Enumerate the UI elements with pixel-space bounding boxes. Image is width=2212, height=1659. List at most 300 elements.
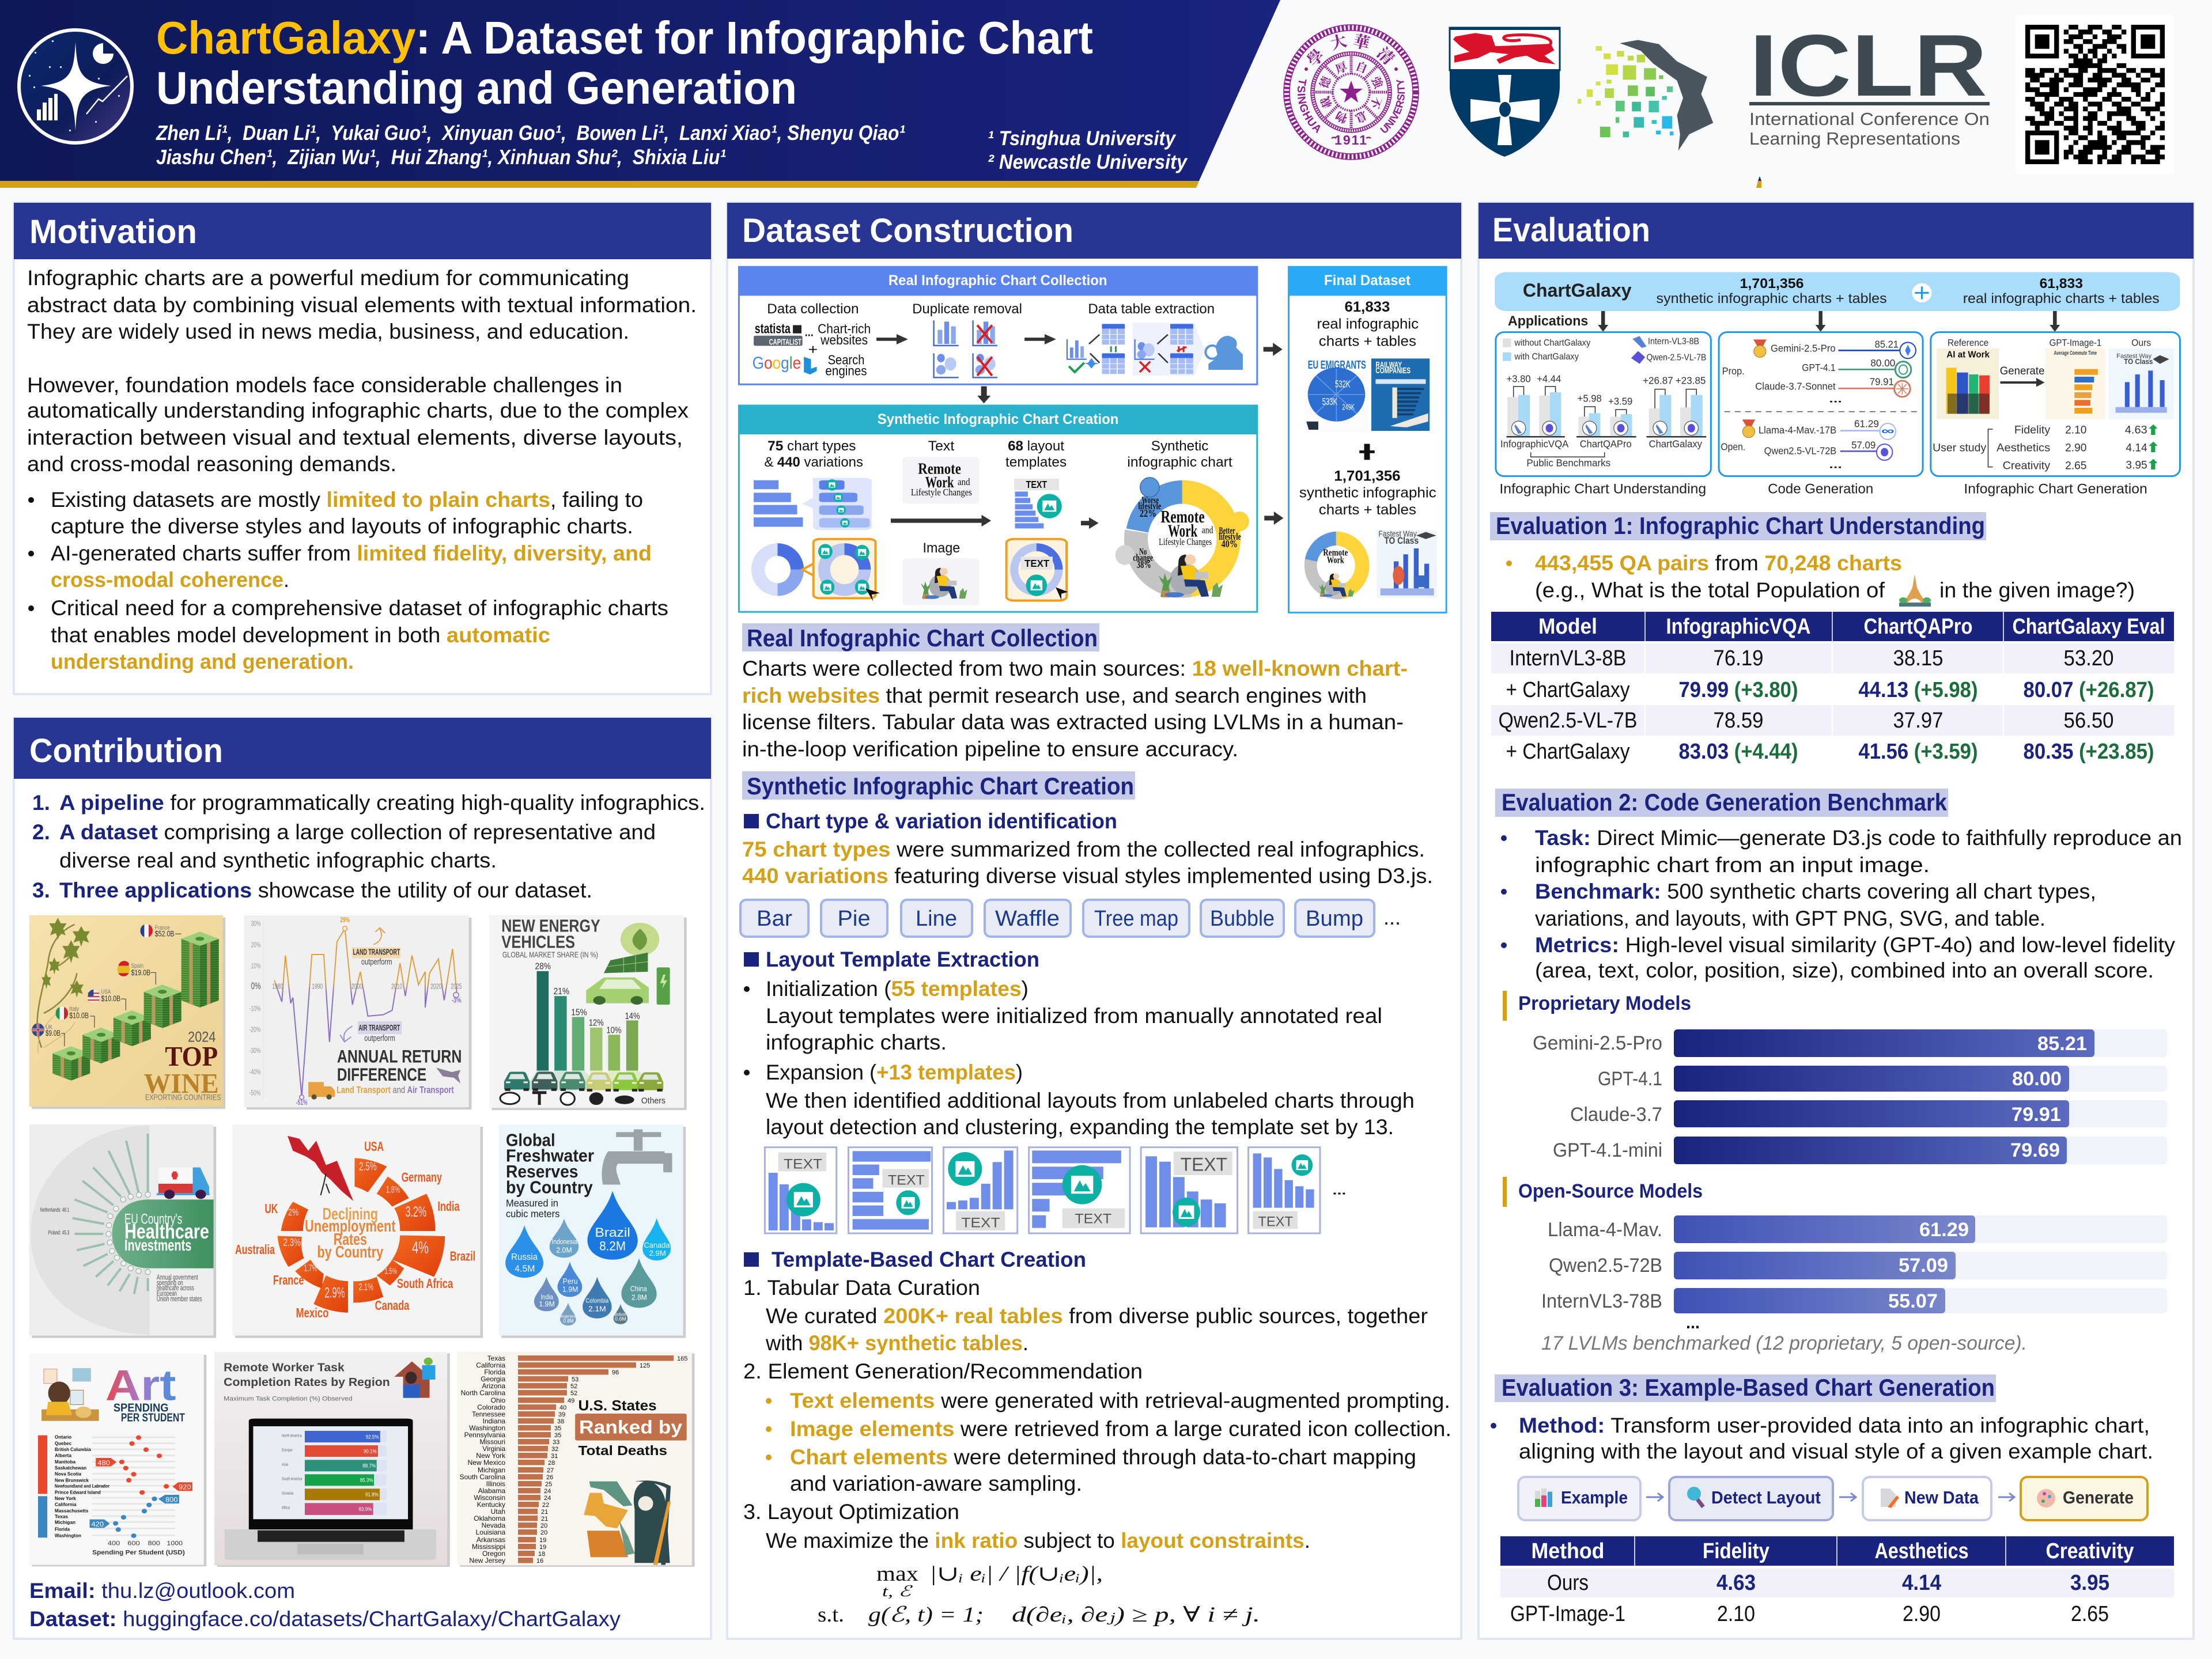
thumbnail: annual return difference: 2000 xyxy=(351,982,362,991)
note: LVLMs benchmarked xyxy=(1541,1313,2027,1354)
thumbnail: declining unemployment: Canada xyxy=(375,1298,410,1313)
chips: chart types xyxy=(740,900,1401,937)
box: real infographic chart collection: Chart-rich xyxy=(818,321,871,336)
text block: real infographic chart collection xyxy=(742,623,1408,761)
bullet list: task, benchmark, metrics: Task: Direct Mimic—generate D3.js code to faithfully reproduce an xyxy=(1535,826,2182,850)
thumbnail: new energy vehicles: 10% xyxy=(606,1025,621,1035)
box: infographic chart generation: 2.65 xyxy=(2065,459,2086,472)
table: evaluation 3 results: Ours xyxy=(1547,1571,1589,1595)
section: evaluation 3 xyxy=(1491,1374,2174,1626)
thumbnail: annual return difference: 30% xyxy=(251,919,260,927)
section: evaluation 1 xyxy=(1490,512,2174,764)
heading: motivation xyxy=(14,203,711,259)
diagram: ChartGalaxy applications: ChartGalaxy xyxy=(1649,438,1702,450)
bar chart: total deaths by state: Alabama xyxy=(478,1487,505,1495)
panel: contribution xyxy=(14,718,711,1639)
box: code generation: ... xyxy=(1829,459,1842,471)
bar chart: open-source models: InternVL3-78B xyxy=(1541,1290,1662,1312)
heading: dataset construction xyxy=(727,203,1461,259)
table: evaluation 1 results: 56.50 xyxy=(2064,709,2113,733)
bar chart: total deaths by state: South Carolina xyxy=(460,1473,505,1481)
step: new data: New Data xyxy=(1904,1487,1979,1508)
thumbnail: art spending: 800 xyxy=(165,1496,178,1503)
thumbnail: art spending: New York xyxy=(55,1496,76,1501)
thumbnail: global freshwater reserves: 2.9M xyxy=(649,1249,666,1257)
bar chart: total deaths by state: 26 xyxy=(546,1474,553,1481)
box: final dataset: 533K xyxy=(1322,396,1337,407)
thumbnail: annual return difference: outperform xyxy=(361,957,392,967)
band: dataset summary: synthetic infographic charts + tables xyxy=(1657,291,1887,306)
thumbnail: annual return difference: 20% xyxy=(251,941,260,949)
bar chart: total deaths by state: 35 xyxy=(554,1425,561,1432)
chart: synthetic donut: and xyxy=(1202,525,1213,535)
bar chart: proprietary models: GPT-4.1 xyxy=(1598,1068,1662,1090)
thumbnail: healthcare investments: Netherlands: 48.1 xyxy=(40,1206,69,1213)
thumbnail: global freshwater reserves: Argentina xyxy=(561,1315,577,1319)
table: evaluation 3 results: 4.63 xyxy=(1716,1571,1756,1595)
bar chart: total deaths by state: Nevada xyxy=(482,1521,505,1529)
text block: intro: automatically understanding infographic charts, due to the complex xyxy=(27,399,689,422)
box: infographic chart understanding: +26.87 xyxy=(1643,375,1673,387)
box: synthetic infographic chart creation: TEXT xyxy=(1024,558,1049,569)
thumbnail: new energy vehicles: 15% xyxy=(571,1007,587,1017)
text block: method: Method: Transform user-provided data into an infographic chart, xyxy=(1519,1414,2150,1437)
chart: synthetic donut xyxy=(1116,478,1249,598)
box: synthetic infographic chart creation xyxy=(739,406,1257,612)
text block: layout template extraction: layout detection and clustering, expanding the template set by 13. xyxy=(766,1115,1394,1139)
box: final dataset: TO Class xyxy=(1384,535,1419,546)
panel: motivation xyxy=(14,203,711,694)
thumbnail: global freshwater reserves: Global xyxy=(506,1130,555,1150)
logo: Tsinghua University: UNIVERSITY xyxy=(1380,79,1405,133)
text block: template-based chart creation: 3. Layout Optimization xyxy=(743,1500,959,1524)
thumbnail: global freshwater reserves: by Country xyxy=(506,1177,593,1197)
bullet list: task, benchmark, metrics: Benchmark: 500 synthetic charts covering all chart types, xyxy=(1535,880,2096,903)
thumbnail: remote worker task completion xyxy=(214,1352,450,1567)
thumbnail: top wine: Italy xyxy=(69,1006,80,1013)
bar chart: total deaths by state: Washington xyxy=(469,1424,505,1432)
bar chart: open-source models xyxy=(1503,1177,2167,1313)
band: dataset summary: ChartGalaxy xyxy=(1523,279,1632,301)
box: code generation: 79.91 xyxy=(1870,376,1894,388)
thumbnail: annual return difference: -40% xyxy=(249,1067,260,1076)
QR code xyxy=(2016,15,2174,174)
thumbnail: global freshwater reserves: 0.6M xyxy=(615,1316,626,1322)
table: evaluation 1 results xyxy=(1491,612,2174,764)
thumbnail: top wine: Spain xyxy=(131,963,143,969)
bar chart: total deaths by state: 21 xyxy=(541,1509,548,1516)
bar chart: total deaths by state: 53 xyxy=(572,1376,578,1383)
chips: chart types: Tree map xyxy=(1094,907,1178,931)
box: final dataset: Final Dataset xyxy=(1324,272,1411,289)
box: real infographic chart collection: + xyxy=(808,342,818,357)
bar chart: total deaths by state: New Mexico xyxy=(468,1459,505,1467)
thumbnail: global freshwater reserves: Canada xyxy=(644,1241,670,1249)
box: code generation: 80.00 xyxy=(1870,357,1895,369)
thumbnail: top wine: $52.0B xyxy=(155,929,174,938)
chips: chart types: Pie xyxy=(838,907,870,931)
box: infographic chart generation: Creativity xyxy=(2003,459,2050,472)
chips: chart types: Line xyxy=(916,907,957,931)
bullet list: challenges: Critical need for a comprehensive dataset of infographic charts xyxy=(51,596,668,620)
thumbnail: remote worker task completion: Oceania xyxy=(282,1491,293,1495)
text block: chart type identification: 440 variations featuring diverse visual styles implemented using D3.js. xyxy=(742,864,1433,888)
logo: Tsinghua University: 1911 xyxy=(1334,132,1368,147)
thumbnail: art spending: 400 xyxy=(108,1540,120,1547)
arrow xyxy=(1646,1493,1663,1501)
thumbnail: global freshwater reserves: Freshwater xyxy=(506,1146,594,1166)
logo: Tsinghua University: 學 xyxy=(1301,43,1329,71)
thumbnail: art spending xyxy=(29,1353,206,1566)
bar chart: total deaths by state: Illinois xyxy=(486,1480,505,1488)
bar chart: total deaths by state: 40 xyxy=(559,1404,566,1411)
box: synthetic infographic chart creation: Text xyxy=(928,438,955,454)
thumbnail: healthcare investments: Annual government xyxy=(157,1274,198,1282)
thumbnail: art spending: Manitoba xyxy=(55,1459,75,1465)
thumbnail: healthcare investments xyxy=(29,1124,216,1338)
thumbnail: annual return difference xyxy=(244,915,471,1109)
bar chart: proprietary models: Proprietary Models xyxy=(1518,993,1691,1014)
box: real infographic chart collection: engines xyxy=(825,363,867,378)
step: detect layout xyxy=(1669,1477,1833,1520)
thumbnail: declining unemployment: by Country xyxy=(317,1243,383,1261)
logo: Tsinghua University: 不 xyxy=(1367,94,1387,112)
bar chart: total deaths by state: 24 xyxy=(544,1488,551,1495)
bar chart: total deaths by state: 20 xyxy=(540,1529,547,1536)
thumbnail: art spending: Art xyxy=(105,1361,176,1410)
box: synthetic infographic chart creation: & 440 variations xyxy=(764,454,863,470)
box: final dataset xyxy=(1289,267,1446,612)
box: infographic chart generation: Reference xyxy=(1948,338,1988,348)
thumbnail: declining unemployment: 2% xyxy=(288,1207,298,1218)
table: evaluation 1 results: Model xyxy=(1538,615,1597,639)
text block: template-based chart creation: Chart elements were determined through data-to-chart mapping xyxy=(790,1445,1416,1469)
thumbnail: declining unemployment: Unemployment xyxy=(305,1217,396,1235)
table: evaluation 1 results: 41.56 (+3.59) xyxy=(1859,740,1977,764)
box: infographic chart generation: Fastest Way xyxy=(2116,353,2151,359)
thumbnail: new energy vehicles: Others xyxy=(641,1096,666,1106)
text block: intro: However, foundation models face considerable challenges in xyxy=(27,373,622,397)
text block: real infographic chart collection: rich websites that permit research use, and search engines with xyxy=(742,684,1367,707)
chart: synthetic donut: 38% xyxy=(1137,559,1151,570)
bar chart: total deaths by state: 27 xyxy=(547,1467,554,1474)
thumbnail: global freshwater reserves: 2.1M xyxy=(588,1305,606,1313)
affiliations xyxy=(988,127,1188,173)
box: infographic chart understanding: +5.98 xyxy=(1578,393,1602,404)
text block: layout template extraction: Expansion (+13 templates) xyxy=(766,1060,1023,1084)
bar chart: proprietary models: Gemini-2.5-Pro xyxy=(1533,1032,1662,1054)
text block: intro: abstract data by combining visual elements with textual information. xyxy=(27,293,697,317)
thumbnail: top wine: France xyxy=(155,925,170,931)
logo: Tsinghua University: 厚 xyxy=(1333,57,1349,77)
box: real infographic chart collection: CAPITALIST xyxy=(769,337,801,346)
thumbnail: remote worker task completion: 83.9% xyxy=(358,1506,372,1512)
thumbnail: art spending: Prince Edward Island xyxy=(55,1490,101,1495)
thumbnail: art spending: Nova Scotia xyxy=(55,1471,81,1477)
thumbnail: global freshwater reserves: cubic meters xyxy=(506,1208,559,1219)
thumbnail: annual return difference: 10% xyxy=(251,961,260,970)
box: final dataset: synthetic infographic xyxy=(1299,484,1436,501)
layout template thumbnails: ... xyxy=(1332,1184,1346,1197)
thumbnail: remote worker task completion: Maximum Task Completion (%) Observed xyxy=(224,1395,353,1402)
thumbnail: remote worker task completion: Completion Rates by Region xyxy=(224,1376,390,1389)
table: evaluation 3 results: GPT-Image-1 xyxy=(1510,1602,1625,1626)
step: generate: Generate xyxy=(2063,1487,2134,1508)
box: final dataset: charts + tables xyxy=(1319,332,1416,349)
arrows: down to applications xyxy=(1598,311,2060,332)
thumbnail: annual return difference: ANNUAL RETURN xyxy=(337,1046,462,1067)
table: evaluation 3 results xyxy=(1500,1536,2174,1626)
note: LVLMs benchmarked: 17 LVLMs benchmarked (12 proprietary, 5 open-source). xyxy=(1541,1332,2027,1354)
thumbnail: new energy vehicles: 21% xyxy=(554,986,569,997)
box: synthetic infographic chart creation: Remote xyxy=(918,461,961,478)
box: infographic chart generation: TO Class xyxy=(2124,358,2153,366)
thumbnail: annual return difference: -10% xyxy=(249,1004,260,1013)
thumbnail: annual return difference: 0% xyxy=(251,980,260,991)
text block: template-based chart creation: 2. Element Generation/Recommendation xyxy=(743,1359,1143,1383)
box: infographic chart understanding: +3.59 xyxy=(1608,396,1632,407)
bar chart: total deaths by state: 96 xyxy=(612,1369,619,1376)
text block: template-based chart creation: We maximize the ink ratio subject to layout constraints. xyxy=(766,1529,1310,1552)
bar chart: open-source models: Open-Source Models xyxy=(1518,1180,1703,1202)
box: real infographic chart collection: Data table extraction xyxy=(1088,301,1215,317)
table: evaluation 1 results: 76.19 xyxy=(1714,646,1763,671)
thumbnail: art spending: California xyxy=(55,1502,77,1508)
thumbnail: top wine: $19.0B xyxy=(131,968,150,977)
thumbnail: global freshwater reserves: 2.0M xyxy=(556,1246,572,1254)
chart: synthetic donut: 22% xyxy=(1140,507,1156,519)
heading: evaluation xyxy=(1479,203,2194,259)
thumbnail: declining unemployment: India xyxy=(437,1199,460,1214)
logo: Tsinghua University: 載 xyxy=(1315,94,1336,111)
thumbnail: declining unemployment: South Africa xyxy=(397,1277,453,1291)
chips: chart types: Waffle xyxy=(995,907,1060,931)
box: infographic chart generation: Fidelity xyxy=(2014,423,2050,436)
thumbnail: declining unemployment: 1.5% xyxy=(384,1267,397,1276)
box: infographic chart understanding: Public Benchmarks xyxy=(1526,457,1610,469)
table: evaluation 1 results: + ChartGalaxy xyxy=(1506,678,1629,702)
bar chart: open-source models: 61.29 xyxy=(1919,1219,1969,1241)
thumbnail: global freshwater reserves: 0.8M xyxy=(563,1318,574,1324)
diagram: ChartGalaxy applications: Applications xyxy=(1508,313,1588,328)
bar chart: total deaths by state: Missouri xyxy=(479,1438,505,1446)
thumbnail: annual return difference: -51% xyxy=(296,1099,308,1107)
text block: layout template extraction: Layout templates were initialized from manually annotated real xyxy=(766,1004,1382,1028)
box: synthetic infographic chart creation: and xyxy=(958,477,970,487)
thumbnail: top wine: $10.0B xyxy=(101,994,120,1003)
bar chart: proprietary models: 85.21 xyxy=(2037,1033,2087,1055)
thumbnail: annual return difference: 29% xyxy=(340,915,350,924)
thumbnail: annual return difference: -20% xyxy=(249,1025,260,1033)
table: evaluation 3 results: Fidelity xyxy=(1703,1539,1769,1563)
box: synthetic infographic chart creation: Image xyxy=(923,540,960,556)
logo: ICLR: International Conference On xyxy=(1749,109,1990,129)
box: infographic chart generation: User study xyxy=(1933,441,1986,454)
logo: ICLR: ICLR xyxy=(1749,17,1987,115)
thumbnail: global freshwater reserves: 1.9M xyxy=(539,1300,555,1308)
bar chart: total deaths by state: 19 xyxy=(539,1544,546,1551)
table: evaluation 1 results: + ChartGalaxy xyxy=(1506,740,1629,764)
text block: method: aligning with the layout and visual style of a given example chart. xyxy=(1519,1440,2153,1463)
bar chart: total deaths by state: Arizona xyxy=(482,1382,505,1390)
thumbnail: new energy vehicles xyxy=(489,915,687,1110)
thumbnail: declining unemployment: 1.8% xyxy=(386,1184,400,1195)
bar chart: total deaths by state: Utah xyxy=(491,1508,505,1516)
thumbnail: global freshwater reserves: Indonesia xyxy=(552,1238,577,1246)
numbered list: contributions: 2. xyxy=(32,820,50,844)
logo: Tsinghua University: 強 xyxy=(1368,74,1388,92)
thumbnail: remote worker task completion: 92.5% xyxy=(366,1434,379,1440)
thumbnail: top wine: EXPORTING COUNTRIES xyxy=(145,1093,221,1102)
thumbnail: annual return difference: 2020 xyxy=(430,982,442,991)
text block: QA pairs: 443,455 QA pairs from 70,248 charts xyxy=(1535,551,1902,575)
box: code generation: Prop. xyxy=(1722,365,1745,377)
sub-heading: Evaluation 1: Infographic Chart Understanding xyxy=(1496,512,1985,539)
thumbnail: declining unemployment: 2.9% xyxy=(324,1285,345,1301)
box: synthetic infographic chart creation: TEXT xyxy=(1026,479,1047,490)
bar chart: total deaths by state: 22 xyxy=(542,1502,549,1509)
box: real infographic chart collection: Search xyxy=(828,353,864,368)
formula: layout optimization xyxy=(818,1562,1260,1627)
box: infographic chart understanding: with ChartGalaxy xyxy=(1514,351,1579,362)
box: real infographic chart collection: ... xyxy=(805,325,814,339)
diagram: ChartGalaxy applications: +23.85 xyxy=(1676,375,1706,387)
arrow xyxy=(1839,1493,1856,1501)
band: dataset summary: 1,701,356 xyxy=(1740,276,1804,291)
thumbnail: healthcare investments: EU Country's xyxy=(124,1211,182,1227)
box: real infographic chart collection: Google xyxy=(753,353,801,372)
table: evaluation 1 results: 44.13 (+5.98) xyxy=(1859,678,1977,702)
title: Understanding and Generation xyxy=(156,62,797,113)
chart: synthetic donut: Lifestyle Changes xyxy=(1159,537,1212,547)
thumbnail: healthcare investments: Investments xyxy=(124,1236,191,1254)
thumbnail: declining unemployment: 3.2% xyxy=(405,1204,426,1220)
heading: contribution xyxy=(14,718,711,779)
thumbnail: remote worker task completion: Europe xyxy=(282,1448,293,1452)
thumbnail: annual return difference: LAND TRANSPORT xyxy=(353,947,400,957)
box: final dataset: 249K xyxy=(1342,402,1355,411)
thumbnail: global freshwater reserves: India xyxy=(540,1293,553,1301)
box: infographic chart generation: AI at Work xyxy=(1946,350,1990,359)
bar chart: total deaths by state: 20 xyxy=(540,1522,547,1529)
box: infographic chart understanding: without ChartGalaxy xyxy=(1514,338,1590,348)
bar chart: total deaths by state: 32 xyxy=(551,1446,558,1453)
box: synthetic infographic chart creation: templates xyxy=(1005,454,1067,470)
thumbnail: art spending: British Columbia xyxy=(55,1447,91,1452)
chart: synthetic donut: No xyxy=(1139,547,1147,557)
thumbnail: top wine: UK xyxy=(46,1024,53,1031)
bar chart: proprietary models xyxy=(1503,991,2167,1164)
box: infographic chart generation: 4.63 xyxy=(2125,423,2147,436)
box: synthetic infographic chart creation: Lifestyle Changes xyxy=(911,487,972,498)
bullet list: task, benchmark, metrics: infographic chart from an input image. xyxy=(1535,853,1930,877)
thumbnails row 1 and 2 xyxy=(29,915,687,1338)
text block: chart type identification: 75 chart types were summarized from the collected real infographics. xyxy=(742,838,1425,861)
logo: Tsinghua University: 自 xyxy=(1353,56,1370,77)
chart: synthetic donut: lifestyle xyxy=(1138,501,1161,512)
box: final dataset: 1,701,356 xyxy=(1334,467,1401,484)
bar chart: open-source models: 55.07 xyxy=(1888,1290,1938,1312)
diagram: ChartGalaxy applications: Qwen-2.5-VL-7B xyxy=(1647,353,1706,362)
chips: chart types: Bump xyxy=(1306,907,1363,931)
text block: template-based chart creation: with 98K+ synthetic tables. xyxy=(765,1331,1029,1355)
bar chart: total deaths by state: Mississippi xyxy=(472,1543,505,1551)
formula: layout optimization: t, ℰ xyxy=(882,1583,913,1600)
bar chart: proprietary models: 80.00 xyxy=(2012,1068,2062,1090)
bar chart: open-source models: Qwen2.5-72B xyxy=(1549,1255,1662,1277)
step: example: Example xyxy=(1561,1487,1628,1508)
box: infographic chart understanding xyxy=(1496,332,1711,476)
bar chart: total deaths by state: Pennsylvania xyxy=(464,1431,505,1439)
thumbnail: global freshwater reserves: Bolivia xyxy=(614,1312,626,1317)
box: real infographic chart collection: Data collection xyxy=(767,301,859,317)
bar chart: total deaths by state: 19 xyxy=(539,1537,546,1544)
chips: chart types: ... xyxy=(1383,906,1401,929)
bar chart: total deaths by state: Louisiana xyxy=(476,1528,505,1536)
box: real infographic chart collection: Real Infographic Chart Collection xyxy=(888,272,1107,289)
box: code generation: Claude-3.7-Sonnet xyxy=(1755,381,1836,392)
logo: Tsinghua University xyxy=(1283,24,1419,160)
panel: evaluation xyxy=(1479,203,2194,1639)
thumbnail: global freshwater reserves: 1.9M xyxy=(562,1285,578,1294)
thumbnail: remote worker task completion: North America xyxy=(282,1433,302,1438)
thumbnail: top wine xyxy=(29,915,225,1109)
box: infographic chart generation: Average Commute Time xyxy=(2054,350,2097,356)
bar chart: total deaths by state: 165 xyxy=(677,1355,687,1362)
bar chart: total deaths by state: 25 xyxy=(545,1481,552,1488)
thumbnail: art spending: 1000 xyxy=(167,1540,183,1547)
table: evaluation 3 results: 2.90 xyxy=(1903,1602,1941,1626)
bar chart: total deaths by state xyxy=(460,1354,687,1565)
thumbnail: annual return difference: 2025 xyxy=(451,982,462,991)
text block: template-based chart creation: Template-Based Chart Creation xyxy=(772,1248,1086,1271)
bar chart: proprietary models: 79.69 xyxy=(2010,1139,2060,1161)
bar chart: total deaths by state: Texas xyxy=(487,1354,505,1362)
sub-heading: Evaluation 2: Code Generation Benchmark xyxy=(1502,789,1948,816)
affiliations: ¹ Tsinghua University xyxy=(988,127,1176,150)
table: evaluation 3 results: 4.14 xyxy=(1902,1571,1941,1595)
note: LVLMs benchmarked: ... xyxy=(1686,1313,1700,1332)
thumbnail: art spending: Newfoundland and Labrador xyxy=(55,1483,109,1489)
icon: ChartGalaxy logo xyxy=(19,30,132,143)
arrow: real to synthetic xyxy=(977,387,990,403)
thumbnail: global freshwater reserves xyxy=(499,1124,686,1338)
thumbnail: remote worker task completion: South America xyxy=(282,1476,303,1481)
thumbnail: healthcare investments: spending on xyxy=(157,1279,183,1287)
logo: Tsinghua University: 物 xyxy=(1333,108,1349,128)
layout template thumbnails: TEXT xyxy=(1181,1154,1227,1175)
box: final dataset: Work xyxy=(1327,555,1344,565)
bar chart: total deaths by state: Georgia xyxy=(481,1375,505,1383)
thumbnail: global freshwater reserves: Brazil xyxy=(595,1226,630,1240)
thumbnail: art spending: Alberta xyxy=(55,1453,71,1459)
bar chart: total deaths by state: 52 xyxy=(570,1390,577,1397)
table: evaluation 1 results: ChartQAPro xyxy=(1863,615,1973,639)
numbered list: contributions: A dataset comprising a large collection of representative and xyxy=(59,820,656,844)
numbered list: contributions: diverse real and synthetic infographic charts. xyxy=(59,849,497,872)
bar chart: total deaths by state: Oklahoma xyxy=(474,1514,505,1522)
thumbnail: annual return difference: 2010 xyxy=(391,982,402,991)
bar chart: total deaths by state: New Jersey xyxy=(469,1556,505,1565)
diagram: ChartGalaxy applications xyxy=(1495,272,2180,497)
bar chart: total deaths by state: Virginia xyxy=(482,1445,505,1453)
thumbnail: global freshwater reserves: 8.2M xyxy=(599,1239,626,1253)
thumbnail: art spending: Spending Per Student (USD) xyxy=(92,1549,185,1556)
table: evaluation 3 results: Aesthetics xyxy=(1875,1539,1968,1563)
thumbnail: annual return difference: 1990 xyxy=(312,982,323,991)
layout template thumbnails: TEXT xyxy=(1075,1211,1111,1226)
box: final dataset: Fastest Way xyxy=(1378,529,1417,539)
